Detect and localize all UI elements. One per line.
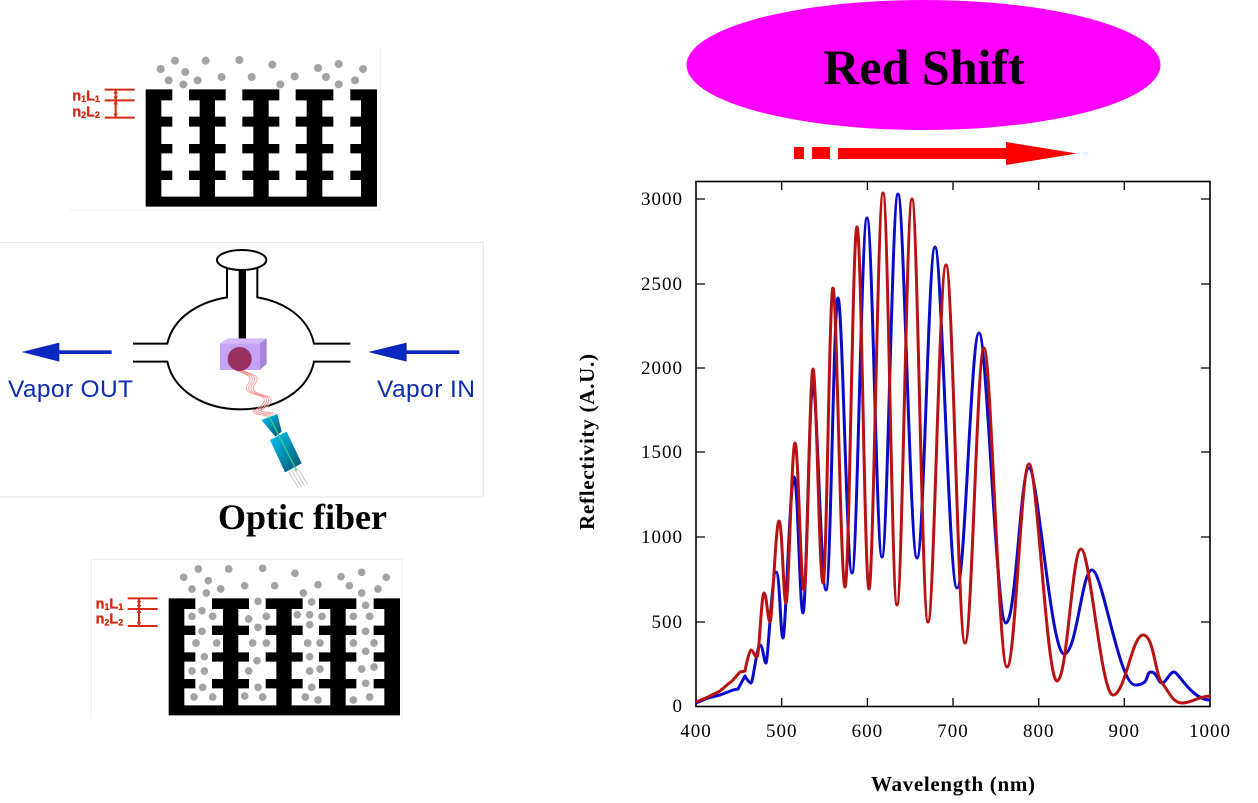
x axis title: Wavelength (nm) bbox=[871, 772, 1035, 796]
layer thickness labels bbox=[72, 88, 135, 120]
y axis tick labels: 500 bbox=[652, 612, 683, 633]
y axis tick labels bbox=[641, 189, 683, 717]
red spectrum curve bbox=[696, 193, 1210, 703]
panel: porous structure before vapor infiltration bbox=[70, 48, 380, 210]
layer thickness labels bbox=[96, 596, 158, 628]
layer thickness labels: 2 bbox=[104, 617, 109, 627]
title: red shift ellipse: Red Shift bbox=[823, 39, 1025, 95]
layer thickness labels: n bbox=[72, 88, 81, 104]
optical signal waves bbox=[236, 371, 275, 417]
layer thickness labels: 1 bbox=[118, 602, 123, 612]
x axis tick labels: 600 bbox=[852, 721, 883, 742]
title: red shift ellipse bbox=[686, 0, 1160, 130]
label: optic fiber: Optic fiber bbox=[218, 497, 387, 537]
x axis tick labels bbox=[680, 721, 1231, 742]
arrow: red shift direction bbox=[794, 142, 1077, 165]
panel: porous structure after vapor infiltration bbox=[91, 559, 402, 718]
layer thickness labels: 2 bbox=[81, 110, 86, 120]
optic fiber probe bbox=[261, 414, 308, 488]
y axis tick labels: 2500 bbox=[641, 274, 683, 295]
layer thickness labels: 1 bbox=[95, 94, 100, 104]
layer thickness labels: n bbox=[72, 104, 81, 120]
layer thickness labels: 1 bbox=[104, 602, 109, 612]
vapor particles above and inside pores bbox=[180, 564, 390, 704]
flask bbox=[133, 250, 350, 409]
layer thickness labels: n bbox=[96, 612, 104, 628]
x axis tick labels: 400 bbox=[680, 721, 712, 742]
y axis tick labels: 3000 bbox=[641, 189, 683, 210]
layer thickness labels: 2 bbox=[118, 617, 123, 627]
porous layer structure bbox=[146, 89, 377, 207]
layer thickness labels: L bbox=[109, 612, 118, 628]
y axis tick labels: 1000 bbox=[641, 527, 683, 548]
x axis tick labels: 1000 bbox=[1189, 721, 1231, 742]
arrow: vapor out bbox=[22, 343, 112, 362]
y axis title: Reflectivity (A.U.) bbox=[575, 354, 599, 530]
porous layer structure bbox=[169, 598, 400, 715]
layer thickness labels: L bbox=[86, 104, 95, 120]
x axis tick labels: 500 bbox=[766, 721, 797, 742]
layer thickness labels: L bbox=[86, 88, 95, 104]
layer thickness labels: n bbox=[96, 596, 104, 612]
vapor particles above the surface bbox=[157, 56, 367, 88]
panel: vapor chamber with optic fiber bbox=[0, 242, 483, 497]
arrow: vapor in bbox=[368, 343, 459, 362]
chart: reflectivity vs wavelength bbox=[575, 182, 1231, 796]
layer thickness labels: 1 bbox=[81, 94, 86, 104]
chart axes and ticks bbox=[696, 182, 1210, 706]
blue spectrum curve bbox=[696, 194, 1210, 703]
y axis tick labels: 2000 bbox=[641, 358, 683, 379]
y axis tick labels: 1500 bbox=[641, 442, 683, 463]
x axis tick labels: 700 bbox=[937, 721, 969, 742]
x axis tick labels: 800 bbox=[1023, 721, 1054, 742]
sample cube bbox=[220, 338, 267, 371]
x axis tick labels: 900 bbox=[1109, 721, 1140, 742]
y axis tick labels: 0 bbox=[672, 696, 683, 717]
label: vapor in: Vapor IN bbox=[377, 376, 475, 403]
label: vapor out: Vapor OUT bbox=[8, 376, 133, 403]
layer thickness labels: 2 bbox=[95, 110, 100, 120]
layer thickness labels: L bbox=[109, 596, 118, 612]
